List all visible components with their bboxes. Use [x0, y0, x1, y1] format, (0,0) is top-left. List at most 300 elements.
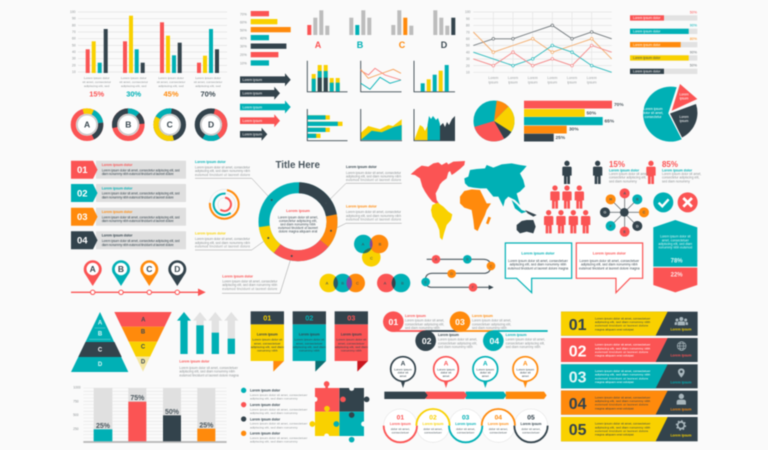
horizontal bar list: 70%: [240, 12, 247, 16]
line chart: 20: [466, 64, 470, 68]
folded note cards 01 02 03: [251, 311, 368, 372]
callout pins with arrow bar: [384, 357, 547, 399]
arrow list: [240, 73, 291, 141]
percent hexagon 78% 22%: [653, 220, 697, 292]
legend list: [241, 388, 307, 444]
progress bars: 90%: [690, 50, 698, 54]
bar chart: four groups: Lorem ipsum dolor: [158, 76, 184, 80]
numbered bubbles 01 to 04: 03: [455, 317, 465, 327]
pyramid chart: C: [98, 347, 103, 353]
progress bars: [630, 10, 698, 74]
venn diagram: A B C row: B: [341, 280, 344, 286]
folded note cards 01 02 03: nonummy nibh: [341, 349, 362, 353]
callout pins with arrow bar: dolor sit: [480, 371, 491, 375]
legend list: Lorem ipsum dolor: [250, 432, 281, 436]
funnel chart: [114, 312, 172, 372]
venn diagram: three circles: C: [370, 256, 373, 260]
venn diagram: three circles: A: [362, 242, 365, 246]
circle steps 01 to 05: 02: [429, 415, 437, 422]
jigsaw puzzle: [309, 381, 369, 442]
network hub diagram: F: [610, 224, 613, 228]
mini bar icons A B C D: C: [399, 40, 406, 50]
statistic: 85%: Lorem ipsum dolor: [662, 168, 693, 172]
banner list 01 to 05: magna aliquam erat volutpat: [595, 406, 634, 410]
line chart: Lorem: [587, 76, 597, 80]
folded note cards 01 02 03: adipiscing elit, sed diam: [293, 345, 326, 349]
legend list: Lorem ipsum dolor sit amet, consectetuer: [250, 436, 307, 440]
line chart: 80: [466, 24, 470, 28]
stacked percentage bars: [524, 101, 624, 142]
statistic: 15%: sed diam nonummy: [609, 179, 637, 183]
text block: teal note: adipiscing elit, sed diam nonummy nibh: [195, 169, 250, 173]
network hub diagram: [600, 188, 649, 237]
circle steps 01 to 05: Lorem ipsum: [488, 422, 509, 426]
exploded pie chart: ipsum: [680, 96, 689, 100]
circle steps 01 to 05: dolor sit amet,: [489, 427, 508, 431]
numbered bubbles 01 to 04: consectetuer adipiscing elit,: [506, 341, 545, 345]
line chart: Lorem: [567, 76, 577, 80]
bar chart: four groups: sit amet, consectetur: [82, 80, 111, 84]
text block: yellow note: euismod tincidunt ut laoreet dolore: [195, 245, 250, 249]
column chart with percentages: 25%: [96, 423, 111, 430]
circle steps 01 to 05: Lorem ipsum: [390, 422, 411, 426]
numbered list 01 to 04: 03: [77, 212, 88, 223]
folded note cards 01 02 03: 01: [263, 314, 271, 323]
numbered list 01 to 04: Lorem ipsum dolor: [102, 163, 133, 167]
stacked percentage bars: 25%: [556, 135, 566, 141]
legend list: Lorem ipsum dolor sit amet, consectetuer: [250, 422, 307, 426]
numbered list 01 to 04: Lorem ipsum dolor sit amet, consectetur adipiscing elit, sed: [102, 168, 180, 172]
folded note cards 01 02 03: amet, consectetuer: [338, 341, 365, 345]
progress bars: 90%: [690, 24, 698, 28]
exploded pie chart: ipsum: [680, 119, 689, 123]
callout pins with arrow bar: dolor sit: [398, 371, 408, 375]
banner list 01 to 05: Lorem ipsum: [671, 328, 691, 332]
horizontal bar list: 20%: [240, 53, 247, 57]
funnel chart: A: [141, 318, 146, 324]
venn diagram: A B pair: B: [401, 280, 404, 286]
horizontal bar list: 40%: [240, 36, 247, 40]
venn diagram: A B C row: [319, 274, 365, 292]
line chart: 90: [466, 17, 470, 21]
folded note cards 01 02 03: Lorem ipsum: [341, 333, 362, 337]
banner list 01 to 05: Lorem ipsum dolor sit amet, consectetuer: [595, 422, 650, 426]
numbered bubbles 01 to 04: Lorem ipsum: [506, 333, 527, 337]
bar chart: four groups: 70%: [200, 90, 216, 98]
text block: dark note: Lorem ipsum dolor sit amet, consectetur: [346, 171, 402, 175]
text block: yellow note: [195, 232, 251, 249]
text block: orange note: [346, 204, 402, 222]
donut badges A B C D: A: [84, 120, 90, 130]
text block: dark note: euismod tincidunt ut laoreet dolore: [346, 178, 401, 182]
venn diagram: A B C row: A: [326, 280, 329, 286]
network hub diagram: B: [636, 198, 639, 202]
folded note cards 01 02 03: adipiscing elit, sed diam: [251, 345, 284, 349]
circle steps 01 to 05: 05: [527, 415, 535, 422]
text block: orange note: euismod tincidunt ut laoreet dolore: [346, 218, 401, 222]
mini bar icons A B C D: D: [441, 40, 448, 50]
stacked percentage bars: 70%: [614, 102, 624, 108]
callout pins with arrow bar: A: [483, 361, 488, 368]
progress bars: 50%: [690, 64, 698, 68]
circle steps 01 to 05: 01: [397, 415, 404, 422]
speech bubble: red: adipiscing elit, sed diam nonummy nibh: [581, 263, 638, 267]
banner list 01 to 05: adipiscing elit, sed diam nonummy nibh: [595, 399, 651, 403]
column chart with percentages: 75%: [130, 395, 145, 402]
arrow list: Lorem ipsum: [242, 92, 262, 96]
network hub diagram: A: [623, 192, 626, 196]
column chart with percentages: 500: [73, 413, 79, 417]
statistic: 15%: [609, 160, 648, 183]
numbered list 01 to 04: Lorem ipsum dolor sit amet, consectetur adipiscing elit, sed: [102, 239, 180, 243]
line chart: 10: [466, 70, 470, 74]
title: Title Here: [275, 160, 320, 171]
horizontal bar list: 10%: [240, 61, 247, 65]
pyramid chart: B: [98, 332, 103, 338]
callout pins with arrow bar: Lorem ipsum: [477, 367, 495, 371]
upward arrow chart: Lorem ipsum dolor: [179, 360, 210, 364]
folded note cards 01 02 03: Lorem ipsum: [257, 333, 278, 337]
callout pins with arrow bar: Lorem ipsum: [394, 367, 412, 371]
icon: cross mark: [678, 192, 698, 212]
line chart: Lorem: [488, 76, 498, 80]
statistic: 85%: consectetur adipiscing elit,: [662, 176, 699, 180]
text block: dark note: [346, 165, 402, 182]
banner list 01 to 05: 02: [569, 343, 587, 360]
line chart: 30: [466, 57, 470, 61]
numbered list 01 to 04: diam nonummy nibh euismod tincidunt ut laoreet dolore: [102, 196, 174, 200]
circle steps 01 to 05: Lorem ipsum: [455, 422, 476, 426]
winding path steps A to F: C: [490, 264, 493, 268]
banner list 01 to 05: magna aliquam erat volutpat: [595, 354, 634, 358]
bar chart: four groups: sit amet, consectetur: [194, 80, 222, 84]
central donut chart with leader lines: euismod tincidunt ut laoreet: [278, 226, 318, 230]
central donut chart with leader lines: Lorem ipsum dolor sit amet,: [278, 216, 318, 220]
bar chart: four groups: 45%: [163, 90, 179, 98]
legend list: Lorem ipsum dolor sit amet, consectetuer: [250, 407, 307, 411]
text block: red note: Lorem ipsum dolor: [222, 274, 254, 278]
column chart with percentages: 25%: [199, 422, 214, 429]
pyramid chart: A: [98, 320, 103, 326]
callout pins with arrow bar: Lorem ipsum: [437, 367, 455, 371]
central donut chart with leader lines: [195, 178, 402, 293]
numbered list 01 to 04: diam nonummy nibh euismod tincidunt ut laoreet dolore: [102, 243, 174, 247]
exploded pie chart: consectetur: [644, 115, 662, 119]
folded note cards 01 02 03: amet, consectetuer: [296, 341, 323, 345]
banner list 01 to 05: Lorem ipsum: [671, 381, 691, 385]
speech bubble: red: Lorem ipsum dolor sit amet, consectetuer: [580, 259, 640, 263]
exploded pie chart: Lorem: [679, 92, 689, 96]
bar chart: four groups: sit amet, consectetur: [157, 80, 185, 84]
numbered bubbles 01 to 04: sed diam nonummy nibh: [506, 345, 541, 349]
circle steps 01 to 05: dolor sit amet,: [423, 427, 443, 431]
numbered bubbles 01 to 04: 01: [389, 317, 398, 327]
icon: gear: [676, 421, 685, 430]
callout pins with arrow bar: amet: [443, 374, 450, 378]
stacked percentage bars: 50%: [586, 110, 597, 116]
numbered list 01 to 04: Lorem ipsum dolor: [102, 234, 133, 238]
banner list 01 to 05: euismod tincidunt ut laoreet dolore: [595, 376, 649, 380]
circle steps 01 to 05: [384, 409, 548, 442]
exploded pie chart: Lorem: [679, 115, 689, 119]
column chart with percentages: [73, 386, 227, 442]
speech bubble: teal: [505, 243, 572, 293]
numbered bubbles 01 to 04: sed diam nonummy nibh: [405, 326, 440, 330]
numbered bubbles 01 to 04: Lorem ipsum dolor sit amet,: [438, 338, 477, 342]
mini chart: area: [361, 109, 402, 141]
banner list 01 to 05: adipiscing elit, sed diam nonummy nibh: [595, 320, 651, 324]
numbered bubbles 01 to 04: sed diam nonummy nibh: [472, 326, 507, 330]
line chart: ipsum: [528, 80, 537, 84]
bar chart: four groups: adipiscing elit, sed: [158, 84, 184, 88]
column chart with percentages: 250: [73, 427, 79, 431]
arrow list: Lorem ipsum: [242, 78, 262, 82]
text block: red note: euismod tincidunt ut laoreet dolore: [222, 287, 277, 291]
people icons: [544, 161, 656, 233]
numbered bubbles 01 to 04: Lorem ipsum: [438, 333, 459, 337]
arrow list: Lorem ipsum: [242, 119, 262, 123]
callout pins with arrow bar: amet: [482, 374, 489, 378]
line chart: ipsum: [587, 80, 596, 84]
numbered list 01 to 04: Lorem ipsum dolor: [102, 186, 133, 190]
map pins on timeline: B: [118, 264, 124, 274]
text block: red note: Lorem ipsum dolor sit amet, consectetur: [222, 280, 278, 284]
numbered list 01 to 04: 02: [77, 188, 88, 199]
banner list 01 to 05: euismod tincidunt ut laoreet dolore: [595, 403, 649, 407]
line chart: 40: [466, 50, 470, 54]
line chart: 70: [466, 30, 470, 34]
upward arrow chart: [177, 312, 239, 377]
banner list 01 to 05: Lorem ipsum dolor sit amet, consectetuer: [595, 395, 650, 399]
world map: [411, 161, 537, 240]
speech bubble: teal: adipiscing elit, sed diam nonummy nibh: [510, 263, 567, 267]
mini bar icons A B C D: A: [315, 40, 322, 50]
numbered bubbles 01 to 04: consectetuer adipiscing elit,: [438, 341, 477, 345]
banner list 01 to 05: 05: [569, 422, 587, 439]
text block: red note: [222, 274, 278, 291]
banner list 01 to 05: 03: [569, 370, 587, 387]
legend list: adipiscing elit, sed diam nonummy: [250, 397, 298, 401]
statistic: 85%: Lorem ipsum dolor sit amet,: [662, 172, 701, 176]
bar chart: four groups: sit amet, consectetur: [119, 80, 148, 84]
speech bubble: teal: Lorem ipsum dolor sit amet, consectetuer: [508, 259, 569, 263]
donut badges A B C D: B: [125, 120, 131, 130]
bar chart: four groups: Lorem ipsum dolor: [84, 76, 110, 80]
numbered list 01 to 04: Lorem ipsum dolor sit amet, consectetur adipiscing elit, sed: [102, 215, 180, 219]
numbered list 01 to 04: 04: [77, 236, 88, 247]
arrow list: Lorem ipsum: [242, 105, 262, 109]
column chart with percentages: 50%: [165, 409, 180, 416]
progress bars: 80%: [690, 37, 698, 41]
folded note cards 01 02 03: nonummy nibh: [299, 349, 320, 353]
numbered bubbles 01 to 04: sed diam nonummy nibh: [438, 345, 473, 349]
legend list: Lorem ipsum dolor: [250, 403, 281, 407]
line chart: ipsum: [567, 80, 577, 84]
banner list 01 to 05: euismod tincidunt ut laoreet dolore: [595, 429, 649, 433]
central donut chart with leader lines: Lorem ipsum: [286, 209, 311, 213]
line chart: [465, 10, 612, 84]
winding path steps A to F: D: [450, 272, 453, 276]
text block: yellow note: Lorem ipsum dolor: [195, 232, 226, 236]
folded note cards 01 02 03: Lorem ipsum dolor sit: [252, 338, 282, 342]
icon: check mark: [653, 192, 673, 212]
callout pins with arrow bar: A: [444, 361, 449, 368]
exploded pie chart: [643, 84, 697, 142]
column chart with percentages: 750: [73, 399, 79, 403]
banner list 01 to 05: Lorem ipsum: [671, 354, 691, 358]
banner list 01 to 05: euismod tincidunt ut laoreet dolore: [595, 350, 649, 354]
banner list 01 to 05: magna aliquam erat volutpat: [595, 327, 634, 331]
bar chart: four groups: adipiscing elit, sed: [121, 84, 147, 88]
percent hexagon 78% 22%: Lorem ipsum dolor sit: [660, 235, 691, 239]
progress bars: Lorem ipsum dolor: [633, 70, 661, 74]
banner list 01 to 05: [561, 312, 698, 441]
pyramid chart: [71, 312, 128, 372]
text block: orange note: Lorem ipsum dolor sit amet, consectetur: [346, 210, 402, 214]
icon: person: [677, 394, 686, 405]
progress bars: Lorem ipsum dolor: [633, 30, 661, 34]
legend list: adipiscing elit, sed diam nonummy: [250, 411, 298, 415]
icon: group of people: [675, 317, 688, 325]
text block: dark note: Lorem ipsum dolor: [346, 165, 377, 169]
network hub diagram: E: [623, 230, 626, 234]
numbered bubbles 01 to 04: 04: [490, 336, 499, 346]
circle steps 01 to 05: Lorem ipsum: [423, 422, 443, 426]
circle steps 01 to 05: consectetuer: [424, 430, 442, 434]
exploded pie chart: Lorem ipsum: [643, 107, 663, 111]
upward arrow chart: Lorem ipsum dolor sit amet, consectetuer: [179, 366, 239, 370]
text block: yellow note: adipiscing elit, sed diam nonummy nibh: [195, 241, 250, 245]
mini bar icons A B C D: [307, 10, 455, 50]
venn diagram: A B C row: C: [356, 280, 359, 286]
legend list: adipiscing elit, sed diam nonummy: [250, 440, 298, 444]
bar chart: four groups: 90: [72, 17, 76, 21]
numbered bubbles 01 to 04: consectetuer adipiscing elit,: [405, 322, 444, 326]
callout pins with arrow bar: dolor sit: [441, 371, 451, 375]
line chart: 50: [466, 44, 470, 48]
network hub diagram: G: [604, 211, 607, 215]
callout pins with arrow bar: A: [523, 361, 528, 368]
statistic: 85%: 85%: [662, 160, 678, 169]
text block: teal note: euismod tincidunt ut laoreet dolore: [195, 173, 250, 177]
venn diagram: three circles: [354, 235, 388, 267]
circle steps 01 to 05: 03: [462, 415, 470, 422]
funnel chart: D: [141, 360, 146, 366]
bar chart: four groups: 30: [72, 57, 76, 61]
line chart: ipsum: [548, 80, 557, 84]
bar chart: four groups: 20: [72, 63, 76, 67]
banner list 01 to 05: adipiscing elit, sed diam nonummy nibh: [595, 373, 651, 377]
arrow list: Lorem ipsum: [242, 133, 262, 137]
banner list 01 to 05: Lorem ipsum dolor sit amet, consectetuer: [595, 343, 650, 347]
line chart: ipsum: [489, 80, 498, 84]
speech bubble: red: euismod tincidunt ut laoreet dolore magna: [579, 266, 640, 270]
winding path steps A to F: E: [424, 280, 427, 284]
percent hexagon 78% 22%: 22%: [671, 272, 683, 278]
circle steps 01 to 05: dolor sit amet,: [456, 427, 475, 431]
folded note cards 01 02 03: Lorem ipsum dolor sit: [294, 338, 324, 342]
network hub diagram: D: [636, 224, 639, 228]
bar chart: four groups: 50: [72, 43, 76, 47]
folded note cards 01 02 03: Lorem ipsum dolor sit: [336, 338, 366, 342]
winding path steps A to F: B: [466, 258, 469, 262]
folded note cards 01 02 03: 02: [305, 314, 313, 323]
venn diagram: A B pair: A: [384, 280, 387, 286]
line chart: Lorem: [528, 76, 538, 80]
numbered list 01 to 04: 01: [77, 165, 88, 176]
banner list 01 to 05: magna aliquam erat volutpat: [595, 433, 634, 437]
bar chart: four groups: adipiscing elit, sed: [195, 84, 221, 88]
numbered bubbles 01 to 04: Lorem ipsum: [472, 314, 493, 318]
callout pins with arrow bar: amet: [522, 374, 529, 378]
bar chart: four groups: Lorem ipsum dolor: [121, 76, 147, 80]
circle steps 01 to 05: Lorem ipsum: [521, 422, 541, 426]
text block: orange note: adipiscing elit, sed diam nonummy nibh: [346, 214, 401, 218]
legend list: adipiscing elit, sed diam nonummy: [250, 425, 298, 429]
mini chart: stacked bars: [307, 61, 348, 92]
funnel chart: B: [141, 329, 146, 335]
banner list 01 to 05: Lorem ipsum: [671, 407, 691, 411]
speech bubble: teal: Lorem ipsum dolor: [521, 252, 555, 256]
banner list 01 to 05: adipiscing elit, sed diam nonummy nibh: [595, 425, 651, 429]
callout pins with arrow bar: amet: [400, 374, 407, 378]
banner list 01 to 05: Lorem ipsum dolor sit amet, consectetuer: [595, 316, 650, 320]
text block: yellow note: Lorem ipsum dolor sit amet, consectetur: [195, 237, 251, 241]
circle steps 01 to 05: 04: [495, 415, 502, 422]
winding path steps A to F: F: [472, 286, 475, 290]
horizontal bar list: 30%: [240, 44, 247, 48]
banner list 01 to 05: magna aliquam erat volutpat: [595, 380, 634, 384]
circle steps 01 to 05: dolor sit amet,: [391, 427, 410, 431]
circle steps 01 to 05: dolor sit amet,: [521, 427, 541, 431]
circle steps 01 to 05: consectetuer: [392, 430, 409, 434]
numbered bubbles 01 to 04: [383, 311, 548, 351]
bar chart: four groups: 70: [72, 30, 76, 34]
banner list 01 to 05: 04: [569, 396, 587, 413]
progress bars: Lorem ipsum dolor: [633, 43, 661, 47]
bar chart: four groups: 10: [72, 70, 76, 74]
banner list 01 to 05: adipiscing elit, sed diam nonummy nibh: [595, 346, 651, 350]
text block: red note: adipiscing elit, sed diam nonummy nibh: [222, 283, 277, 287]
folded note cards 01 02 03: Lorem ipsum: [299, 333, 320, 337]
text block: teal note: Lorem ipsum dolor: [195, 160, 226, 164]
banner list 01 to 05: euismod tincidunt ut laoreet dolore: [595, 324, 649, 328]
mini chart: rising bars: [414, 61, 455, 92]
statistic: 15%: Lorem ipsum dolor: [609, 168, 640, 172]
progress bars: Lorem ipsum dolor: [633, 16, 661, 20]
bar chart: four groups: [70, 10, 227, 98]
numbered list 01 to 04: [71, 161, 186, 249]
mini chart: lines: [361, 61, 402, 92]
legend list: Lorem ipsum dolor sit amet, consectetuer: [250, 393, 307, 397]
statistic: 85%: [662, 160, 701, 183]
network hub diagram: H: [609, 198, 612, 202]
legend list: Lorem ipsum dolor: [250, 389, 281, 393]
bar chart: four groups: 80: [72, 23, 76, 27]
pyramid chart: D: [98, 362, 103, 368]
speech bubble: teal: euismod tincidunt ut laoreet dolore magna: [508, 266, 568, 270]
progress bars: Lorem ipsum dolor: [633, 56, 661, 60]
pie chart: [484, 111, 504, 131]
circle steps 01 to 05: consectetuer: [522, 430, 540, 434]
numbered bubbles 01 to 04: consectetuer adipiscing elit,: [472, 322, 511, 326]
bar chart: four groups: Lorem ipsum dolor: [195, 76, 221, 80]
horizontal bar list: 60%: [240, 20, 247, 24]
venn diagram: A B pair: [377, 274, 410, 292]
numbered list 01 to 04: diam nonummy nibh euismod tincidunt ut laoreet dolore: [102, 219, 174, 223]
line chart: Lorem: [508, 76, 518, 80]
line chart: Lorem: [547, 76, 557, 80]
